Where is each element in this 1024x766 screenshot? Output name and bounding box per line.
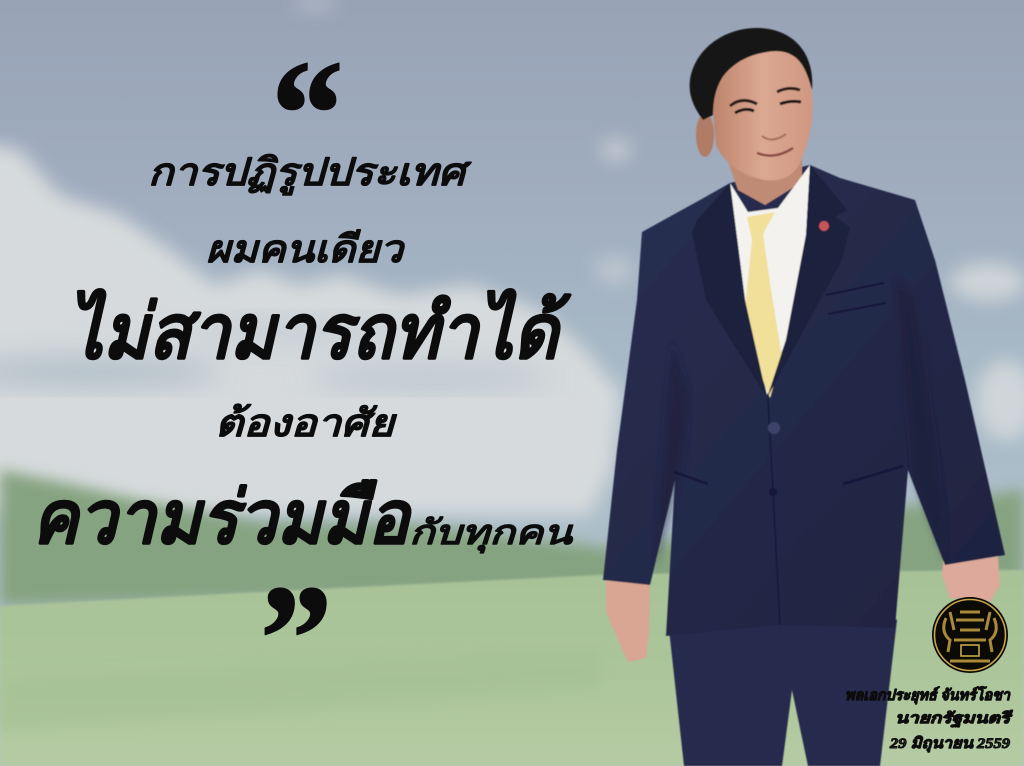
- eyes and brows: [730, 88, 800, 106]
- right lapel: [767, 165, 850, 398]
- field: [0, 570, 1024, 766]
- signature block: นายกรัฐมนตรี: [895, 710, 1014, 728]
- hair: [690, 28, 812, 120]
- quote line 5: emphasis: กับทุกคน: [409, 515, 574, 554]
- right hand: [942, 552, 1000, 602]
- mouth: [757, 148, 793, 156]
- quote line 1: การปฏิรูปประเทศ: [148, 152, 473, 196]
- sleeve shading: [895, 280, 945, 560]
- neck: [724, 150, 802, 205]
- signature block: [845, 685, 1014, 753]
- distant trees: [0, 470, 1024, 606]
- portrait: man in navy suit: [603, 28, 1005, 766]
- nose: [762, 134, 786, 140]
- quote line 2: ผมคนเดียว: [206, 229, 406, 271]
- necktie: [743, 212, 782, 398]
- quote line 3: emphasis: ไม่สามารถทำได้: [68, 288, 572, 375]
- left hand: [606, 580, 650, 662]
- trousers: [668, 560, 897, 766]
- buttons: [768, 422, 780, 434]
- government seal: [932, 597, 1008, 673]
- shirt: [730, 165, 810, 395]
- signature block: พลเอกประยุทธ์ จันทร์โอชา: [845, 685, 1012, 705]
- ear: [696, 113, 714, 157]
- cloud shadow band: [0, 316, 550, 390]
- quote line 4: ต้องอาศัย: [215, 403, 398, 445]
- jacket front seam: [768, 398, 780, 625]
- face: [713, 47, 813, 180]
- quote line 5: emphasis: ความร่วมมือ: [32, 478, 412, 560]
- lapel pin: [819, 221, 829, 231]
- left lapel: [692, 183, 767, 398]
- signature block: 29 มิถุนายน 2559: [889, 735, 1011, 753]
- clouds: [0, 0, 1024, 515]
- closing quotation mark: ”: [251, 553, 329, 725]
- jacket: [603, 165, 1005, 636]
- pocket details: [826, 283, 886, 314]
- opening quotation mark: “: [263, 28, 341, 200]
